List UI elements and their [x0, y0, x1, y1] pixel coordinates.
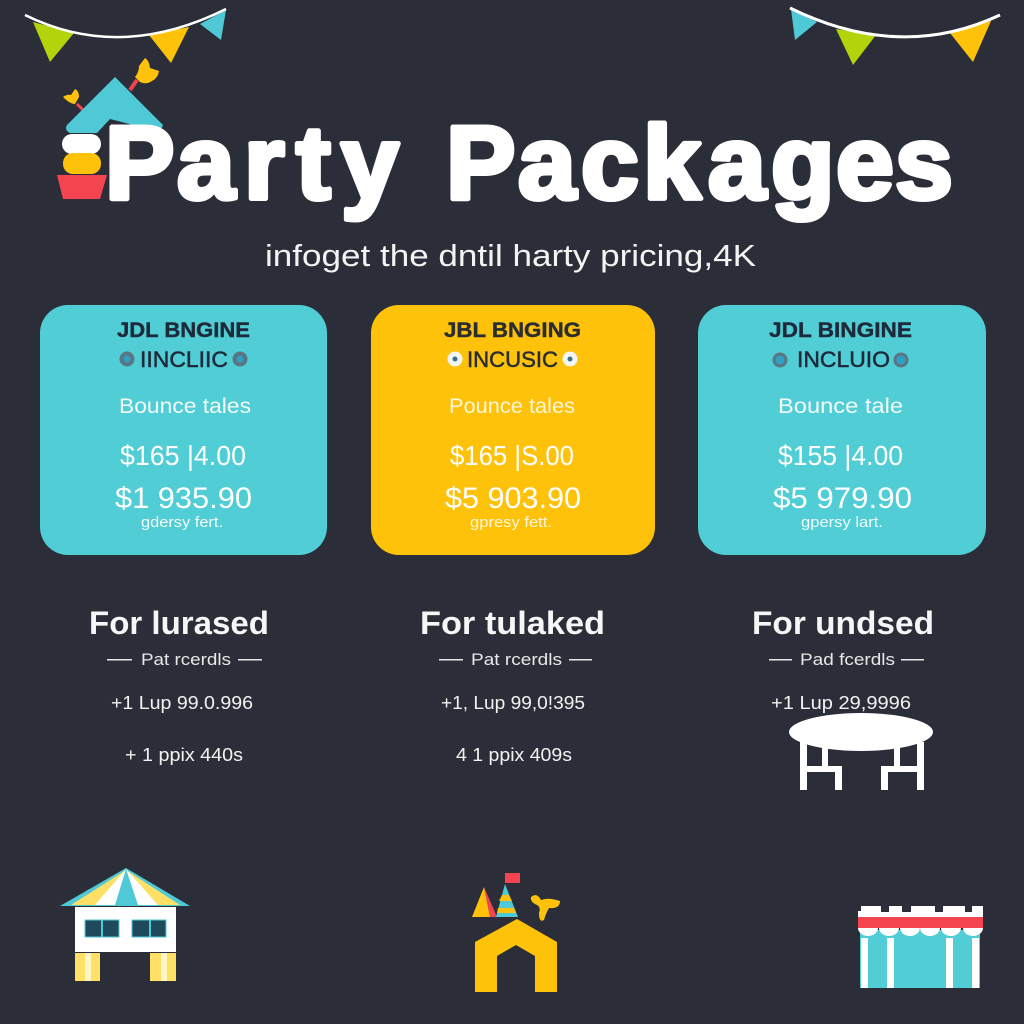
- panel: left pricing card: IINCLIIC: [140, 347, 228, 372]
- text block: right package details: [752, 605, 934, 713]
- title: Party: [105, 106, 399, 222]
- panel: right pricing card: JDL BINGINE: [769, 319, 912, 342]
- panel: right pricing card: [698, 305, 986, 555]
- subtitle: infoget the dntil harty pricing,4K: [265, 238, 756, 273]
- text block: left package details: + 1 ppix 440s: [125, 745, 243, 765]
- panel: left pricing card: [40, 305, 327, 555]
- panel: middle pricing card: INCUSIC: [467, 347, 558, 372]
- text block: middle package details: For tulaked: [420, 605, 605, 641]
- panel: left pricing card: JDL BNGINE: [117, 319, 250, 342]
- panel: middle pricing card: gpresy fett.: [470, 514, 552, 531]
- title: Packages: [446, 106, 953, 222]
- text block: middle package details: 4 1 ppix 409s: [456, 745, 572, 765]
- panel: left pricing card: Bounce tales: [119, 395, 251, 418]
- panel: middle pricing card: [371, 305, 655, 555]
- text block: middle package details: [420, 605, 605, 765]
- title: [105, 106, 953, 222]
- panel: right pricing card: $155 |4.00: [778, 440, 903, 471]
- panel: right pricing card: INCLUIO: [797, 347, 890, 372]
- text block: left package details: For lurased: [89, 605, 269, 641]
- icon: table: [789, 713, 933, 790]
- icon: bounce house: [57, 58, 163, 199]
- panel: middle pricing card: Pounce tales: [449, 395, 575, 418]
- icon: party tent with hats: [472, 873, 560, 992]
- text block: right package details: +1 Lup 29,9996: [771, 693, 911, 713]
- bunting: top right: [790, 8, 1000, 65]
- panel: left pricing card: gdersy fert.: [141, 514, 223, 531]
- icon: striped awning stall: [858, 906, 983, 988]
- panel: middle pricing card: $5 903.90: [445, 482, 581, 515]
- panel: left pricing card: $165 |4.00: [120, 440, 246, 471]
- panel: middle pricing card: $165 |S.00: [450, 440, 574, 471]
- panel: middle pricing card: JBL BNGING: [444, 319, 581, 342]
- text block: right package details: For undsed: [752, 605, 934, 641]
- text block: middle package details: Pat rcerdls: [471, 650, 562, 669]
- bunting: top left: [25, 9, 226, 63]
- panel: right pricing card: $5 979.90: [773, 482, 912, 515]
- text block: left package details: Pat rcerdls: [141, 650, 231, 669]
- text block: right package details: Pad fcerdls: [800, 650, 895, 669]
- text block: left package details: +1 Lup 99.0.996: [111, 693, 253, 713]
- panel: right pricing card: gpersy lart.: [801, 514, 883, 531]
- text block: left package details: [89, 605, 269, 765]
- panel: right pricing card: Bounce tale: [778, 395, 903, 418]
- icon: striped roof house: [60, 868, 190, 981]
- text block: middle package details: +1, Lup 99,0!395: [441, 693, 585, 713]
- panel: left pricing card: $1 935.90: [115, 482, 252, 515]
